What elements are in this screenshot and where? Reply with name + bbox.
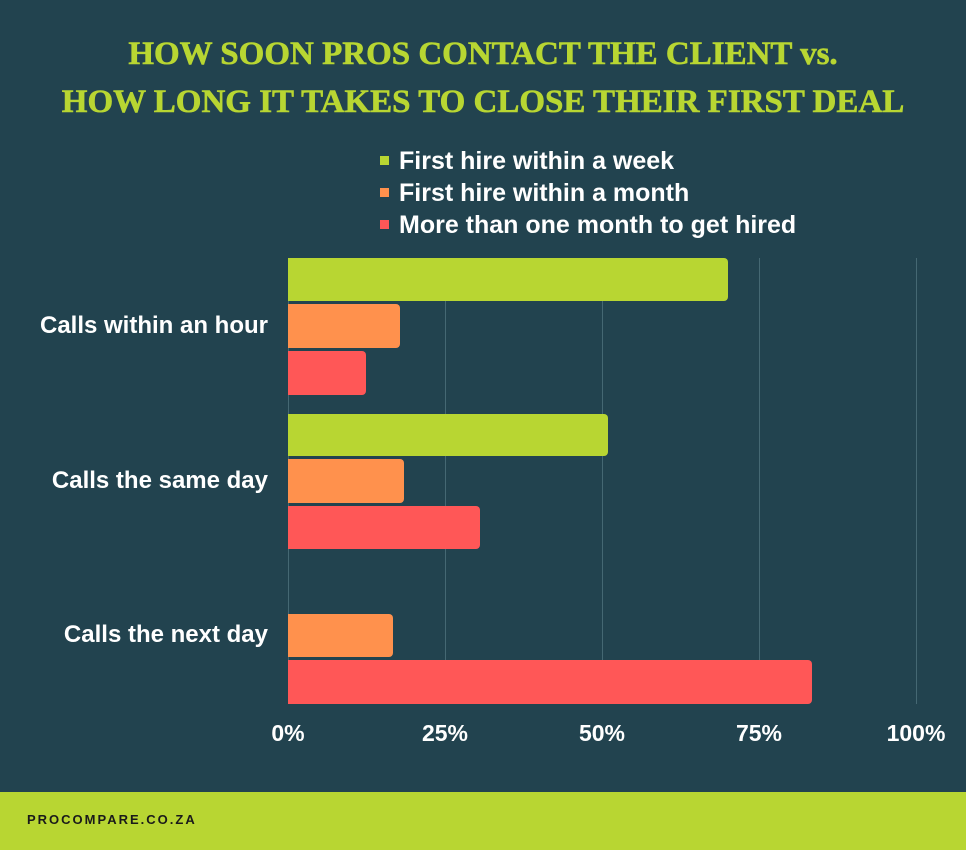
x axis labels: 50% [579,720,625,746]
x axis labels: 25% [422,720,468,746]
title [62,36,904,120]
title: HOW LONG IT TAKES TO CLOSE THEIR FIRST DEAL [62,84,904,120]
category: calls the next day: Calls the next day [64,621,268,648]
legend: month: First hire within a month [399,179,689,207]
x axis labels: 0% [271,720,305,746]
bar: next day more [288,660,812,704]
footer text: PROCOMPARE.CO.ZA [27,812,197,827]
footer [0,792,966,850]
legend: week: First hire within a week [399,147,674,175]
x axis labels: 100% [887,720,945,746]
bar: same day month [288,459,404,503]
bar: next day month [288,614,393,657]
bar: same day week [288,414,608,456]
x axis labels [271,720,945,746]
legend: more than month: More than one month to get hired [399,211,796,239]
category: calls within an hour: Calls within an hour [40,312,268,339]
bar: hour week [288,258,728,301]
title: HOW SOON PROS CONTACT THE CLIENT vs. [128,36,838,72]
bar: hour month [288,304,400,348]
category: calls the same day: Calls the same day [52,467,268,494]
bar chart [40,312,268,648]
x axis labels: 75% [736,720,782,746]
legend [380,147,796,239]
bar: hour more [288,351,366,395]
bar: same day more [288,506,480,549]
